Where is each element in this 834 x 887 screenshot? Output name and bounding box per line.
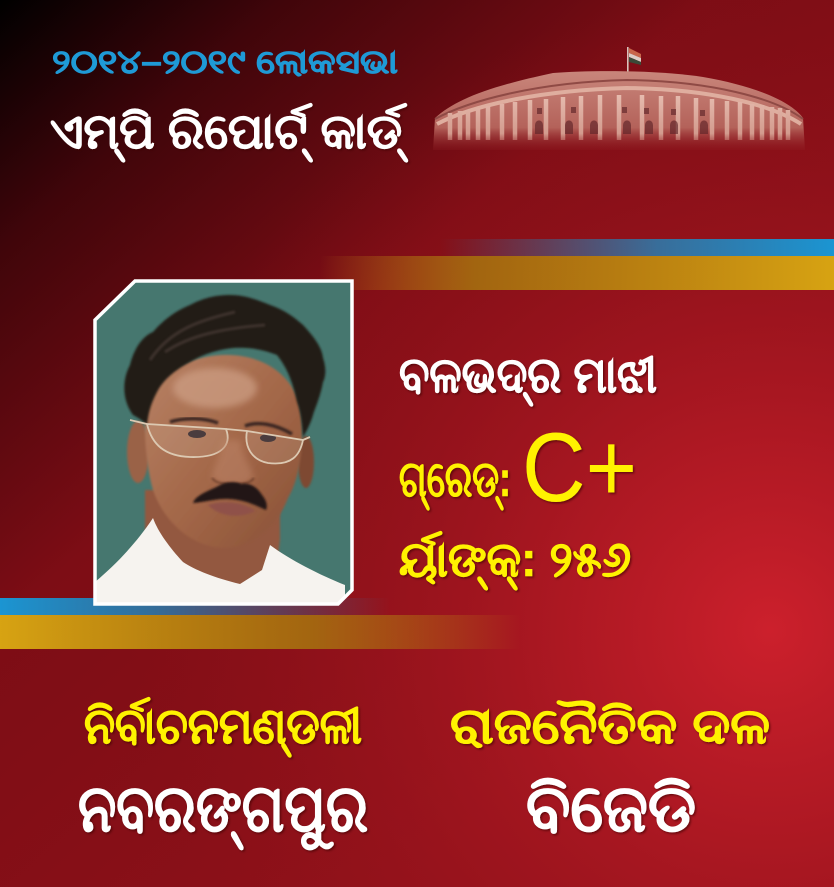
name: ବଳଭଦ୍ର ମାଝୀ xyxy=(399,347,657,407)
arched windows xyxy=(535,107,708,134)
columns xyxy=(450,95,788,140)
grade xyxy=(399,412,637,522)
building body xyxy=(433,71,805,150)
moustache xyxy=(193,482,267,510)
heading: years and Lok Sabha: ୨୦୧୪–୨୦୧୯ ଲୋକସଭା xyxy=(52,43,398,80)
shirt xyxy=(95,518,345,606)
rank: ର୍ୟାଙ୍କ୍: ୨୫୬ xyxy=(399,531,631,590)
glasses xyxy=(130,420,310,463)
face xyxy=(145,355,302,548)
top stripe: gold xyxy=(320,256,834,290)
hair highlights xyxy=(150,312,265,360)
lips xyxy=(208,502,255,516)
political party label: ରାଜନୈତିକ ଦଳ xyxy=(450,698,770,754)
grade label: ଗ୍ରେଡ୍: xyxy=(399,451,511,511)
portrait photo xyxy=(95,281,352,606)
neck xyxy=(145,490,280,595)
hair xyxy=(124,295,325,437)
illustration: parliament building xyxy=(433,47,805,150)
constituency label: ନିର୍ବାଚନମଣ୍ଡଳୀ xyxy=(84,697,362,758)
grade value: C+ xyxy=(522,412,637,522)
bottom stripe: blue xyxy=(0,598,390,615)
photo background xyxy=(95,281,352,604)
icon: flag xyxy=(627,47,641,73)
constituency value: ନବରଙ୍ଗପୁର xyxy=(78,771,368,851)
political party value: ବିଜେଡି xyxy=(526,771,696,845)
ears xyxy=(127,421,149,483)
roof cornice xyxy=(435,80,803,119)
eyes xyxy=(188,430,206,438)
heading: MP report card: ଏମ୍‌ପି ରିପୋର୍ଟ୍ କାର୍ଡ୍ xyxy=(50,103,408,162)
top stripe: blue xyxy=(440,239,834,256)
nose xyxy=(212,440,254,486)
bottom stripe: gold xyxy=(0,615,520,649)
forehead highlight xyxy=(173,368,257,408)
eyebrows xyxy=(170,419,292,434)
photo frame xyxy=(95,281,352,604)
